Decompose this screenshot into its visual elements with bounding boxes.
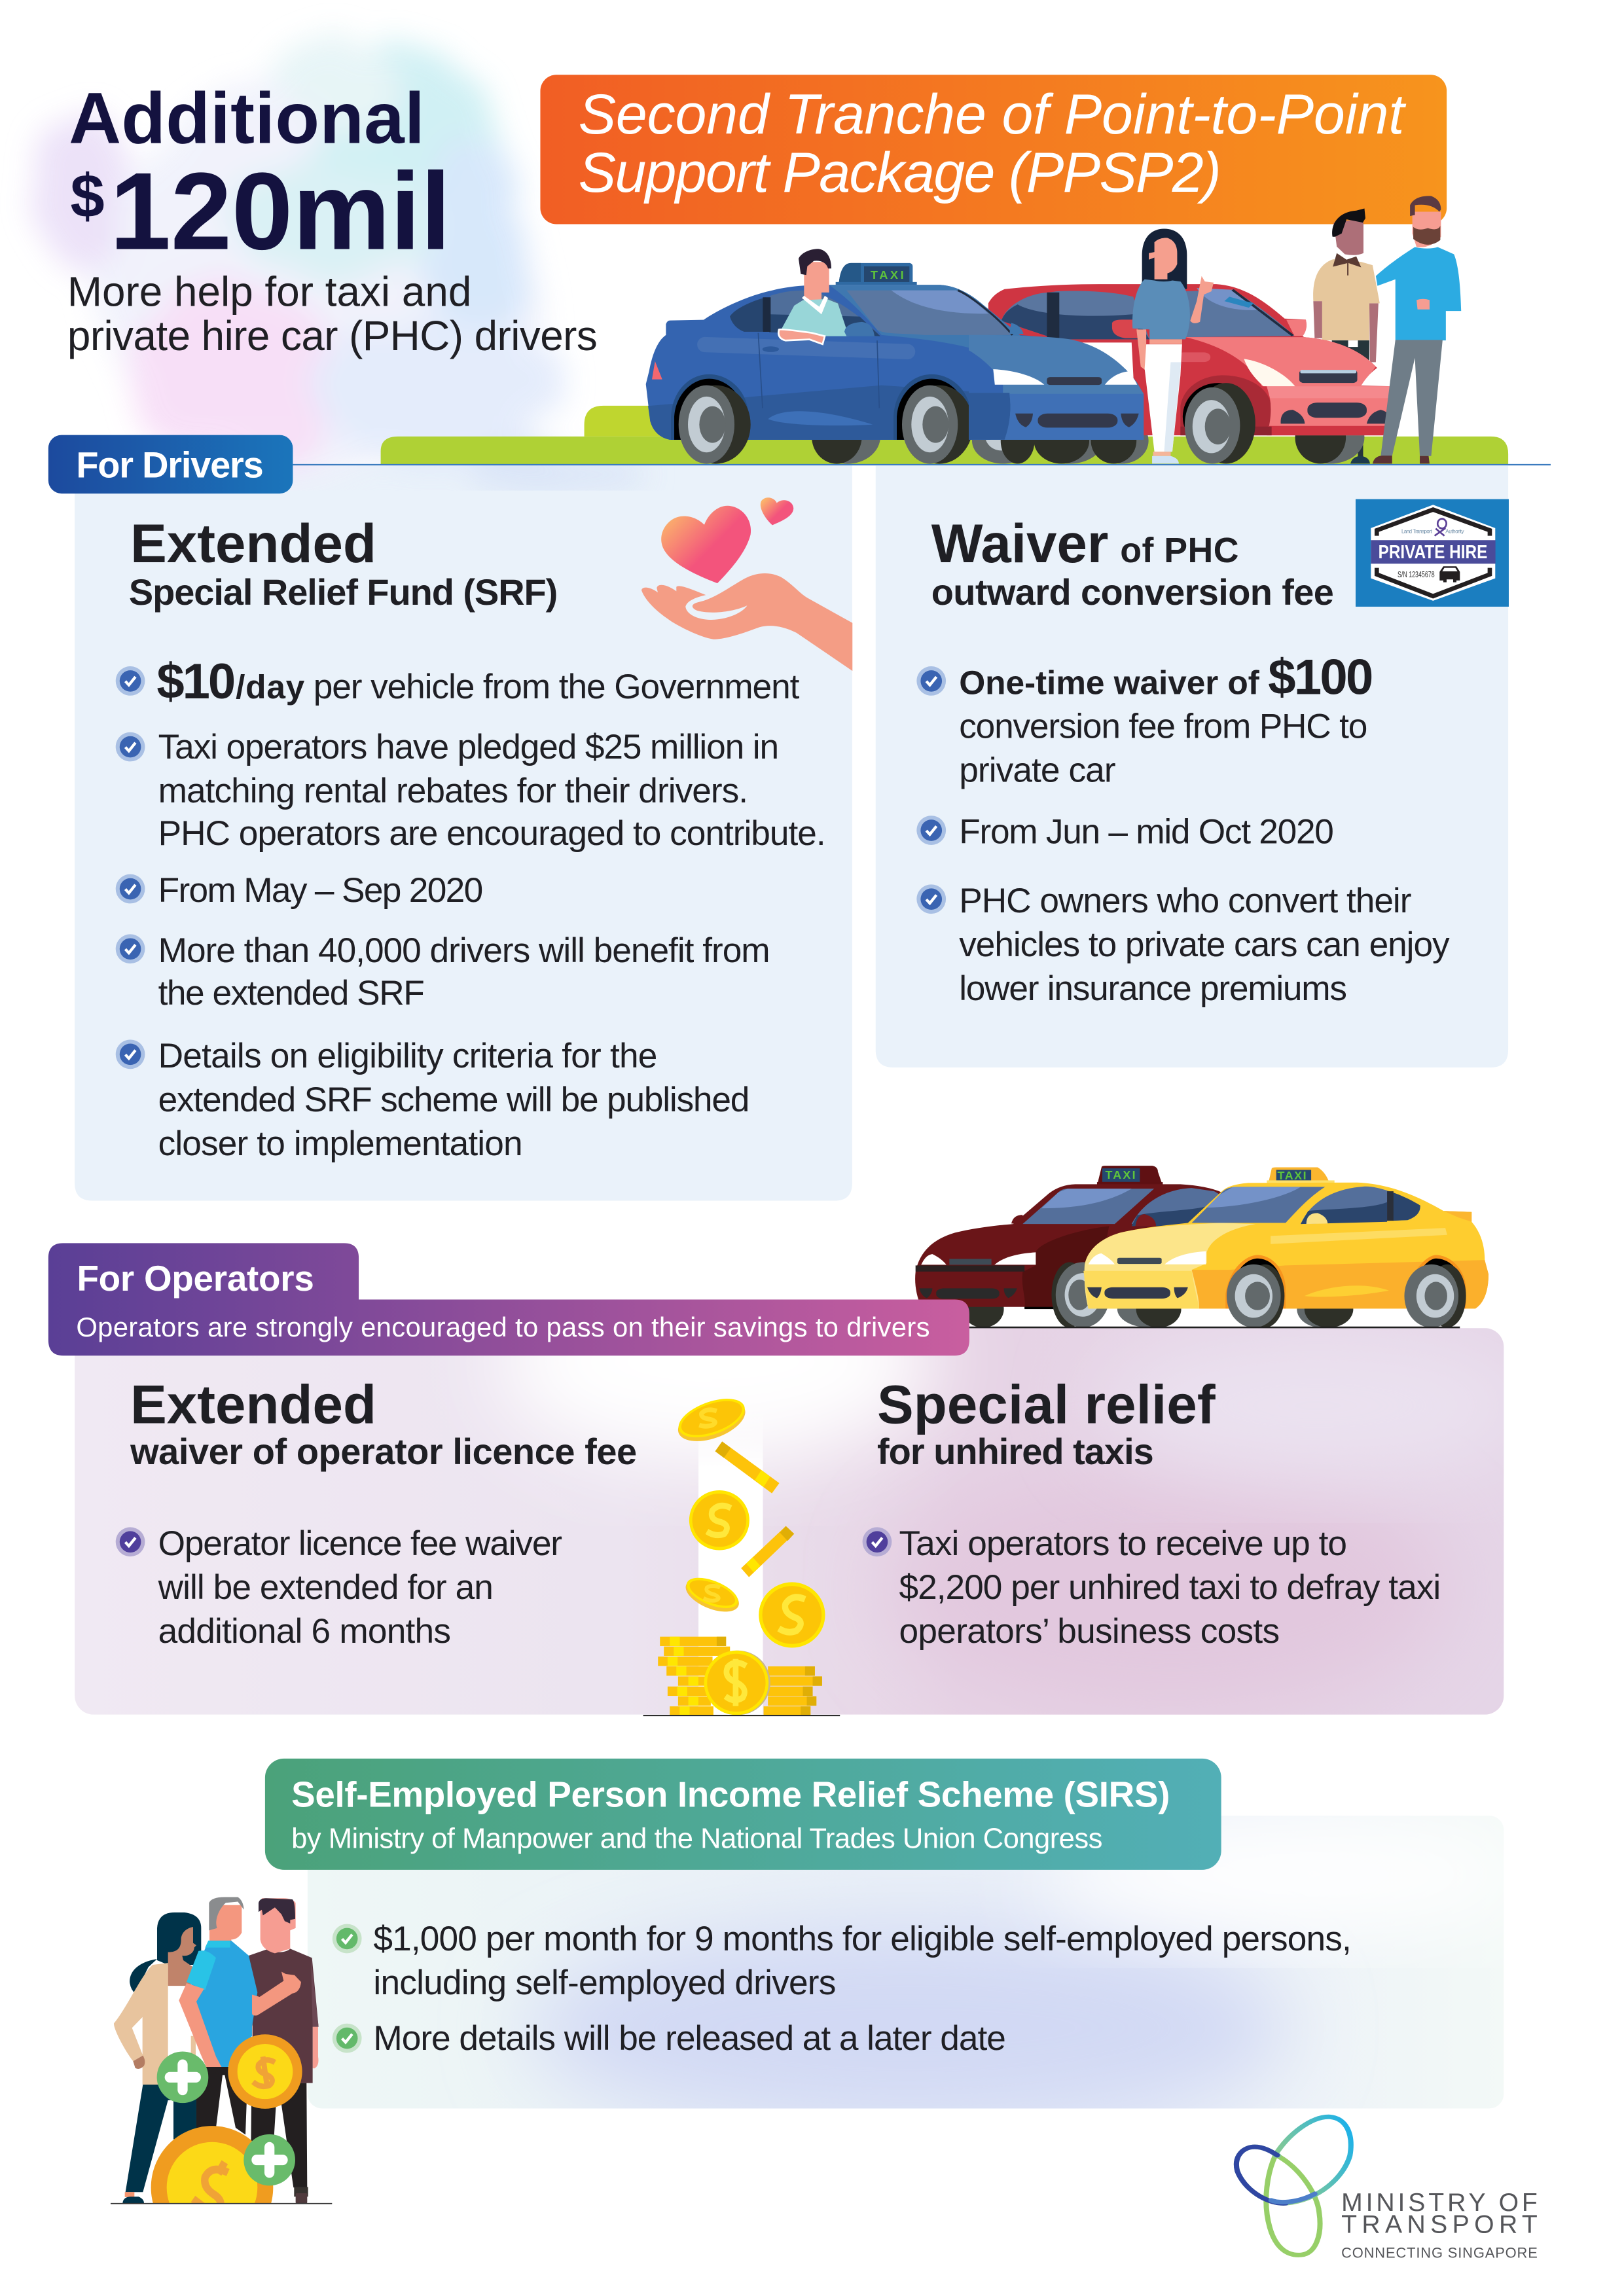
bullet: $10/day: per vehicle from the Government	[314, 668, 800, 706]
title banner: Second Tranche of Point-to-Point	[579, 83, 1406, 146]
heading: extended SRF: Extended	[130, 512, 376, 574]
bullet: 40,000 drivers: the extended SRF	[158, 974, 425, 1013]
panel: extended special relief fund	[75, 464, 852, 1201]
tab: for operators	[48, 1243, 969, 1355]
bullet: lower premiums: PHC owners who convert their	[959, 882, 1411, 920]
bullet: 40,000 drivers: More than 40,000 drivers will benefit from	[158, 931, 770, 970]
illustration: blue taxi with driver	[646, 249, 1144, 464]
bullet: one-time waiver: One-time waiver of	[959, 664, 1260, 702]
bullet: $10/day: /day	[236, 668, 305, 706]
title banner: Support Package (PPSP2)	[579, 141, 1221, 204]
bullet: from May: From May – Sep 2020	[158, 871, 483, 910]
heading: extended SRF: Special Relief Fund (SRF)	[129, 571, 558, 613]
heading: extended waiver: waiver of operator licence fee	[130, 1431, 637, 1472]
heading: extended waiver	[130, 1374, 637, 1472]
panel: operators background	[75, 1328, 1504, 1715]
heading: waiver of PHC: Waiver	[931, 512, 1108, 574]
panel: SIRS background	[308, 1816, 1538, 2130]
bullet: rental rebates	[116, 728, 826, 853]
bullet: unhired taxi relief: operators’ business costs	[899, 1612, 1280, 1651]
green ground strip	[381, 406, 1508, 464]
tab: for drivers: For Drivers	[76, 444, 264, 485]
heading: additional $120mil	[69, 78, 451, 272]
illustration: maroon taxi	[915, 1166, 1221, 1327]
illustration: man in blue shirt	[1373, 196, 1461, 463]
illustration: yellow taxi	[1083, 1167, 1489, 1327]
subtitle: private hire car (PHC) drivers	[67, 312, 598, 359]
bullet: licence fee waiver: Operator licence fee waiver	[158, 1524, 562, 1563]
illustration: group of people with coins	[111, 1897, 333, 2204]
heading: special relief: Special relief	[877, 1374, 1216, 1435]
heading: waiver of PHC: outward conversion fee	[931, 571, 1334, 613]
bullet: eligibility: Details on eligibility criteria for the	[158, 1037, 657, 1075]
bullet: one-time waiver	[916, 650, 1373, 790]
divider line	[293, 464, 1551, 465]
bullet: $1,000 per month	[333, 1920, 1352, 2002]
banner: SIRS: by Ministry of Manpower and the National Trades Union Congress	[291, 1823, 1102, 1854]
heading: waiver of PHC: of PHC	[1120, 531, 1238, 570]
bullet: $10/day	[116, 654, 800, 709]
bullet: licence fee waiver: will be extended for an	[158, 1568, 494, 1607]
illustration: woman	[1132, 228, 1214, 463]
bullet: rental rebates: PHC operators are encouraged to contribute.	[158, 814, 826, 853]
ground line under taxis	[968, 1327, 1460, 1328]
banner: SIRS	[265, 1759, 1221, 1870]
bullet: one-time waiver: $100	[1268, 650, 1373, 706]
heading: extended waiver: Extended	[130, 1374, 376, 1435]
heading: additional $120mil: Additional	[69, 78, 425, 158]
illustration: man in beige shirt	[1313, 208, 1380, 463]
taxi sign labels: TAXI	[1278, 1169, 1307, 1182]
illustration: red car	[972, 284, 1398, 463]
bullet: unhired taxi relief	[863, 1524, 1441, 1651]
bullet: $10/day: $10	[156, 654, 236, 709]
subtitle	[67, 268, 598, 359]
tab: for operators: Operators are strongly encouraged to pass on their savings to drivers	[76, 1312, 929, 1342]
bullet: more details: More details will be released at a later date	[373, 2019, 1006, 2058]
title banner	[540, 75, 1447, 224]
icon: private hire decal	[1356, 499, 1509, 607]
logo: ministry of transport	[1236, 2117, 1538, 2261]
illustration: blue taxi front	[969, 323, 1144, 440]
heading: special relief	[877, 1374, 1216, 1472]
illustration: blue taxi with driver: TAXI	[871, 268, 904, 281]
bullet: rental rebates: matching rental rebates for their drivers.	[158, 772, 748, 810]
logo: ministry of transport: MINISTRY OF	[1341, 2189, 1538, 2217]
panel: waiver of PHC conversion fee	[876, 466, 1508, 1067]
bullet: $1,000 per month: including self-employed drivers	[373, 1964, 836, 2002]
bullet: unhired taxi relief: $2,200 per unhired taxi to defray taxi	[899, 1568, 1441, 1607]
tab: for drivers	[48, 435, 293, 493]
logo: ministry of transport: CONNECTING SINGAPORE	[1341, 2245, 1538, 2261]
bullet: rental rebates: Taxi operators have pledged $25 million in	[158, 728, 779, 766]
icon: private hire decal: PRIVATE HIRE	[1379, 542, 1487, 563]
bullet: one-time waiver: private car	[959, 751, 1116, 790]
heading: additional $120mil: 120mil	[110, 149, 451, 272]
banner: SIRS: Self-Employed Person Income Relief Scheme (SIRS)	[291, 1774, 1170, 1815]
bullet: lower premiums: vehicles to private cars can enjoy	[959, 925, 1450, 964]
tab: for operators: For Operators	[77, 1258, 314, 1299]
bullet: eligibility: closer to implementation	[158, 1124, 523, 1163]
bullet: licence fee waiver	[116, 1524, 562, 1651]
heading: waiver of PHC	[931, 512, 1334, 613]
bullet: lower premiums: lower insurance premiums	[959, 969, 1347, 1008]
icon: private hire decal: Authority	[1445, 529, 1464, 535]
bullet: eligibility	[116, 1037, 749, 1163]
bullet: eligibility: extended SRF scheme will be published	[158, 1081, 749, 1119]
bullet: licence fee waiver: additional 6 months	[158, 1612, 451, 1651]
taxi sign labels: TAXI	[1105, 1168, 1136, 1181]
taxi sign labels	[1105, 1168, 1307, 1182]
icon: private hire decal: S/N 12345678	[1398, 570, 1435, 579]
bullet: lower premiums	[916, 882, 1450, 1008]
heading: additional $120mil: $	[70, 161, 105, 230]
illustration: hand with hearts	[641, 497, 852, 671]
bullet: 40,000 drivers	[116, 931, 770, 1013]
logo: ministry of transport: TRANSPORT	[1341, 2211, 1538, 2239]
subtitle: More help for taxi and	[67, 268, 471, 315]
bullet: $1,000 per month: $1,000 per month for 9 months for eligible self-employed persons,	[373, 1920, 1352, 1958]
bullet: one-time waiver: conversion fee from PHC to	[959, 708, 1367, 746]
icon: private hire decal: Land Transport	[1401, 529, 1432, 535]
illustration: falling coins	[643, 1391, 840, 1715]
heading: special relief: for unhired taxis	[877, 1431, 1154, 1472]
bullet: from Jun: From Jun – mid Oct 2020	[959, 813, 1334, 852]
heading: extended SRF	[129, 512, 558, 613]
bullet: unhired taxi relief: Taxi operators to receive up to	[899, 1524, 1347, 1563]
watercolour backdrop	[28, 34, 651, 498]
